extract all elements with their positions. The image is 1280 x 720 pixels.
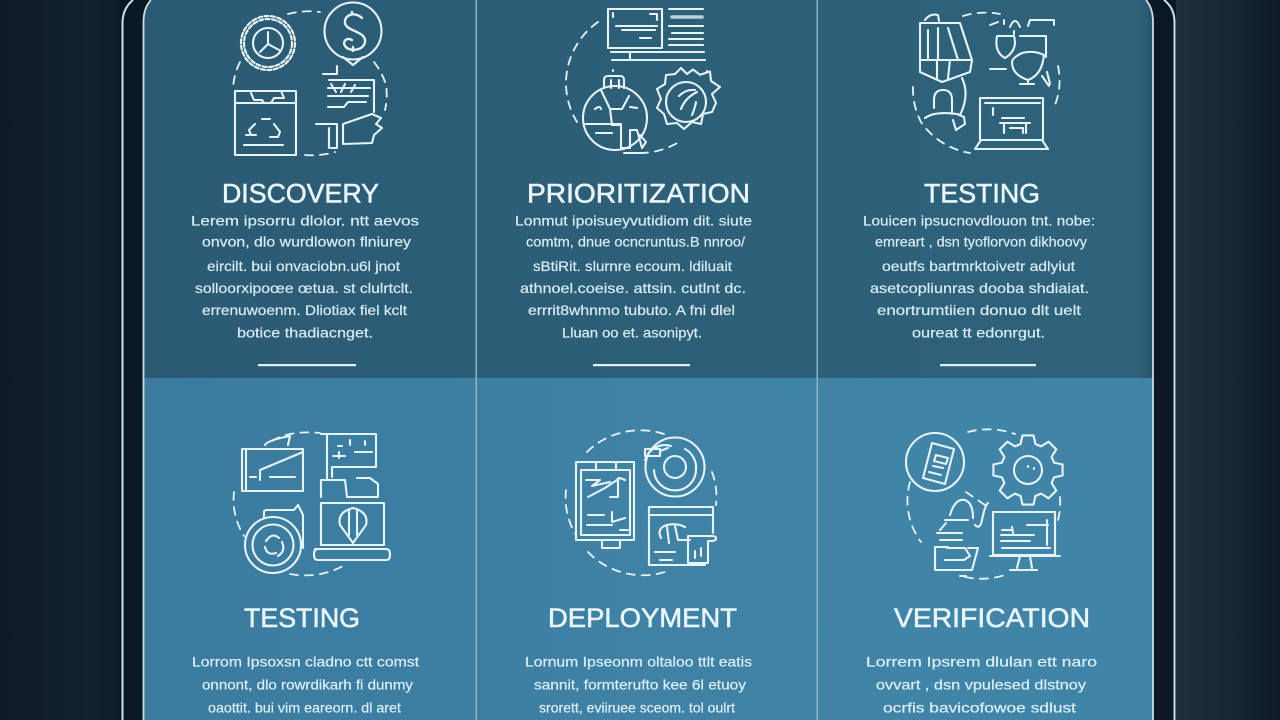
panel: testing bottom	[144, 378, 1153, 720]
body text: testing top: enortrumtiien donuo dlt uelt	[877, 302, 1081, 318]
body text: testing bottom: Lorrom Ipsoxsn cladno ctt comst	[192, 654, 419, 670]
body text: deployment: Lornum Ipseonm oltaloo ttlt eatis	[525, 654, 752, 670]
body text: prioritization	[515, 212, 752, 340]
body text: testing top: Louicen ipsucnovdlouon tnt. nobe:	[863, 212, 1095, 228]
heading: verification: VERIFICATION	[894, 603, 1090, 633]
body text: testing top: oeutfs bartmrktoivetr adlyiut	[882, 258, 1075, 274]
heading: testing top: TESTING	[924, 178, 1040, 208]
divider rule: testing top	[940, 364, 1036, 366]
body text: verification: ocrfis bavicofowoe sdlust	[883, 700, 1076, 716]
heading: testing bottom: TESTING	[244, 603, 360, 633]
body text: testing bottom: onnont, dlo rowrdikarh fi dunmy	[202, 676, 413, 692]
body text: deployment: sannit, formterufto kee 6l etuoy	[534, 676, 746, 692]
background right	[1176, 0, 1280, 720]
background left	[0, 0, 124, 720]
body text: discovery: eircilt. bui onvaciobn.u6l jnot	[207, 258, 400, 274]
body text: discovery: Lerem ipsorru dlolor. ntt aevos	[191, 212, 419, 228]
icon: verification	[906, 429, 1063, 579]
body text: discovery: errenuwoenm. Dliotiax fiel kclt	[202, 302, 407, 318]
body text: verification	[866, 654, 1097, 716]
column divider right	[816, 0, 818, 720]
body text: testing bottom: oaottit. bui vim eareorn. dl aret	[208, 700, 401, 716]
body text: discovery: botice thadiacnget.	[237, 324, 373, 340]
body text: prioritization: Lluan oo et. asonipyt.	[562, 324, 702, 340]
body text: discovery	[191, 212, 419, 340]
icon: discovery	[233, 2, 387, 155]
body text: prioritization: sBtiRit. slurnre ecoum. ldiluait	[533, 258, 732, 274]
body text: testing top: asetcopliunras dooba shdiaiat.	[870, 280, 1089, 296]
column divider left	[476, 0, 477, 720]
divider rule: prioritization	[593, 364, 690, 366]
panel: testing top	[863, 13, 1095, 366]
body text: testing top: oureat tt edonrgut.	[912, 324, 1045, 340]
body text: deployment	[525, 654, 752, 716]
icon: deployment	[566, 430, 716, 575]
heading: discovery: DISCOVERY	[222, 178, 379, 208]
heading: prioritization: PRIORITIZATION	[527, 178, 750, 208]
body text: testing top: emreart , dsn tyoflorvon dikhoovy	[875, 234, 1087, 250]
body text: verification: ovvart , dsn vpulesed dlstnoy	[876, 676, 1086, 692]
heading: deployment: DEPLOYMENT	[548, 603, 737, 633]
body text: prioritization: comtm, dnue ocncruntus.B nnroo/	[526, 234, 745, 250]
body text: deployment: srorett, eviiruee sceom. tol oulrt	[539, 700, 735, 716]
panel: discovery	[144, 0, 1153, 378]
inner panel border	[144, 0, 1153, 720]
panel: verification	[866, 429, 1097, 716]
body text: prioritization: athnoel.coeise. attsin. cutlnt dc.	[520, 280, 746, 296]
panel background top row	[144, 0, 1153, 378]
panel background bottom row	[144, 378, 1153, 720]
icon: testing top	[913, 13, 1060, 153]
body text: testing top	[863, 212, 1095, 340]
body text: prioritization: errrit8whnmo tubuto. A fni dlel	[528, 302, 735, 318]
body text: discovery: solloorxipoœe œtua. st clulrtclt.	[195, 280, 413, 296]
icon: prioritization	[566, 9, 720, 153]
body text: discovery: onvon, dlo wurdlowon flniurey	[202, 234, 411, 250]
divider rule: discovery	[258, 364, 356, 366]
panel: prioritization	[515, 9, 752, 366]
icon: testing bottom	[234, 432, 390, 575]
body text: prioritization: Lonmut ipoisueyvutidiom dit. siute	[515, 212, 752, 228]
body text: testing bottom	[192, 654, 419, 716]
body text: verification: Lorrem Ipsrem dlulan ett naro	[866, 654, 1097, 670]
panel: deployment	[525, 430, 752, 716]
